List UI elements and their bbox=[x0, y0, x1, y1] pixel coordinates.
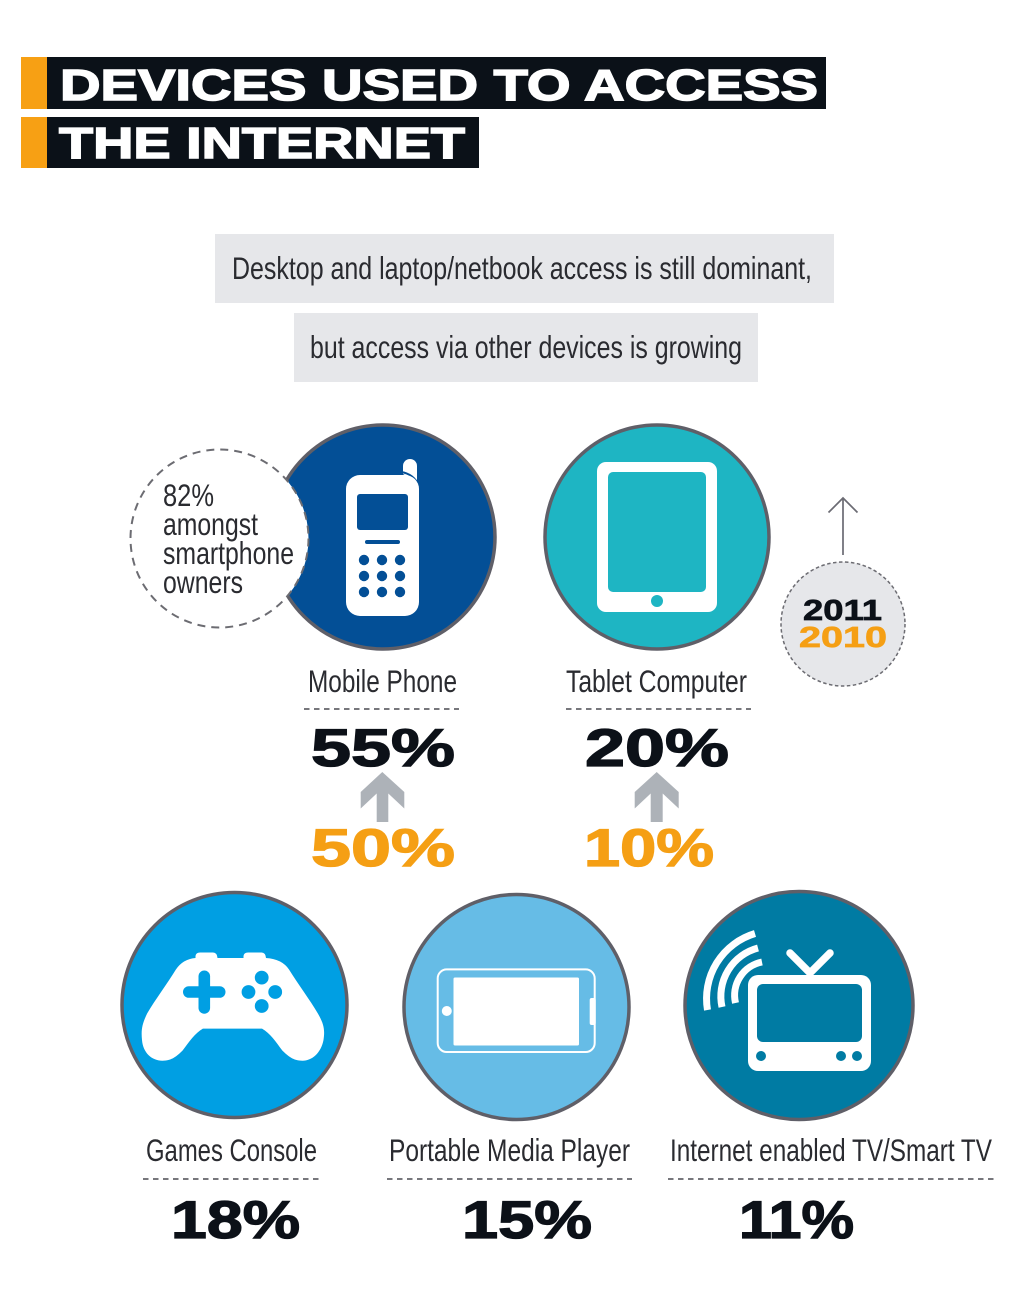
value: portable media player: 15% bbox=[462, 1191, 592, 1250]
panel: portable media player bbox=[387, 894, 632, 1250]
value: mobile phone 2011: 55% bbox=[311, 719, 455, 778]
label: games console: Games Console bbox=[146, 1132, 317, 1168]
callout: smartphone owners: amongst bbox=[163, 506, 258, 542]
arrow: mobile phone growth bbox=[361, 772, 404, 822]
legend: years: 2010 bbox=[799, 622, 887, 654]
subtitle callout: but access via other devices is growing bbox=[310, 329, 742, 365]
legend: years bbox=[781, 562, 905, 686]
title: THE INTERNET bbox=[59, 119, 465, 168]
icon: mobile phone bbox=[271, 425, 495, 649]
panel: tablet computer bbox=[545, 425, 769, 878]
callout: smartphone owners: 82% bbox=[163, 477, 214, 513]
panel: games console bbox=[122, 892, 347, 1250]
icon: tablet bbox=[545, 425, 769, 649]
subtitle callout bbox=[215, 234, 834, 382]
arrow: legend up bbox=[828, 498, 858, 555]
title: DEVICES USED TO ACCESS bbox=[60, 61, 818, 110]
panel: smart tv bbox=[668, 892, 994, 1250]
label: tablet computer: Tablet Computer bbox=[566, 663, 747, 699]
icon: smart tv bbox=[685, 892, 913, 1120]
callout: smartphone owners bbox=[130, 450, 308, 628]
label: portable media player: Portable Media Player bbox=[389, 1132, 630, 1168]
callout: smartphone owners: owners bbox=[163, 564, 243, 600]
value: mobile phone 2010: 50% bbox=[311, 819, 455, 878]
value: smart tv: 11% bbox=[739, 1191, 854, 1250]
icon: game controller bbox=[122, 892, 347, 1118]
title bbox=[21, 57, 826, 168]
callout: smartphone owners: smartphone bbox=[163, 535, 294, 571]
legend: years: 2011 bbox=[803, 595, 882, 627]
icon: media player bbox=[404, 894, 629, 1120]
subtitle callout: Desktop and laptop/netbook access is still dominant, bbox=[232, 250, 812, 286]
value: tablet 2011: 20% bbox=[585, 719, 729, 778]
arrow: tablet growth bbox=[635, 772, 679, 822]
value: games console: 18% bbox=[171, 1191, 300, 1250]
panel: mobile phone bbox=[130, 425, 495, 878]
label: mobile phone: Mobile Phone bbox=[308, 663, 457, 699]
value: tablet 2010: 10% bbox=[584, 819, 714, 878]
